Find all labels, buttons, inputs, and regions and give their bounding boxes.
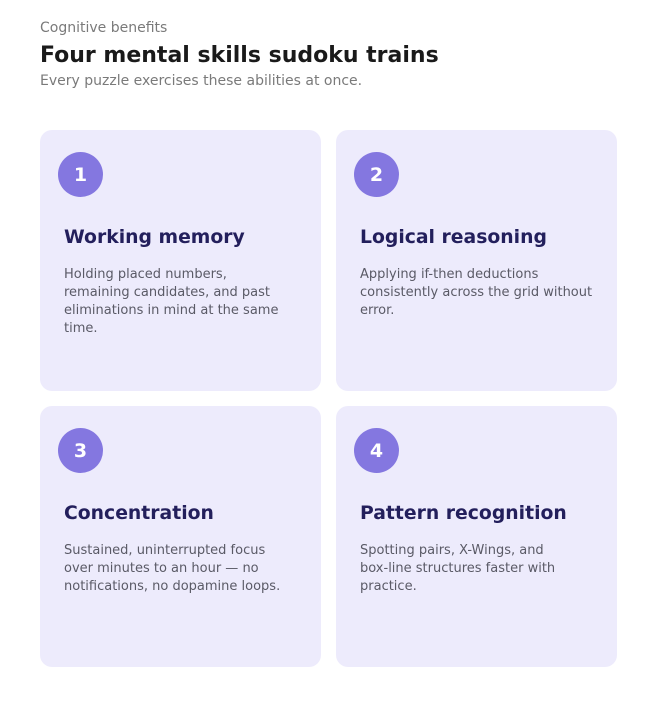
text — [64, 267, 278, 336]
text: notifications, no dopamine loops. — [64, 579, 280, 594]
text: Spotting pairs, X-Wings, and — [360, 543, 544, 558]
text: error. — [360, 303, 394, 318]
heading: Logical reasoning — [360, 227, 547, 248]
icon: number 1 — [58, 152, 103, 197]
title: Four mental skills sudoku trains — [40, 43, 439, 68]
icon: number 1: 1 — [74, 164, 87, 186]
icon: number 4 — [354, 428, 399, 473]
text: over minutes to an hour — no — [64, 561, 259, 576]
heading: Pattern recognition — [360, 503, 567, 524]
text: Holding placed numbers, — [64, 267, 227, 282]
text: time. — [64, 321, 98, 336]
icon: number 3: 3 — [74, 440, 87, 462]
heading: Working memory — [64, 227, 245, 248]
panel: logical reasoning — [336, 130, 617, 391]
icon: number 2: 2 — [370, 164, 383, 186]
panel: concentration — [40, 406, 321, 667]
text — [64, 543, 280, 594]
text: eliminations in mind at the same — [64, 303, 278, 318]
text: remaining candidates, and past — [64, 285, 270, 300]
icon: number 3 — [58, 428, 103, 473]
icon: number 4: 4 — [370, 440, 383, 462]
text — [360, 543, 555, 594]
heading: Concentration — [64, 503, 214, 524]
icon: number 2 — [354, 152, 399, 197]
text: Applying if-then deductions — [360, 267, 538, 282]
text: Sustained, uninterrupted focus — [64, 543, 265, 558]
text: practice. — [360, 579, 417, 594]
panel: pattern recognition — [336, 406, 617, 667]
text: consistently across the grid without — [360, 285, 592, 300]
panel: working memory — [40, 130, 321, 391]
text: box-line structures faster with — [360, 561, 555, 576]
text — [360, 267, 592, 318]
eyebrow: Cognitive benefits — [40, 20, 167, 36]
subtitle: Every puzzle exercises these abilities at once. — [40, 73, 362, 89]
